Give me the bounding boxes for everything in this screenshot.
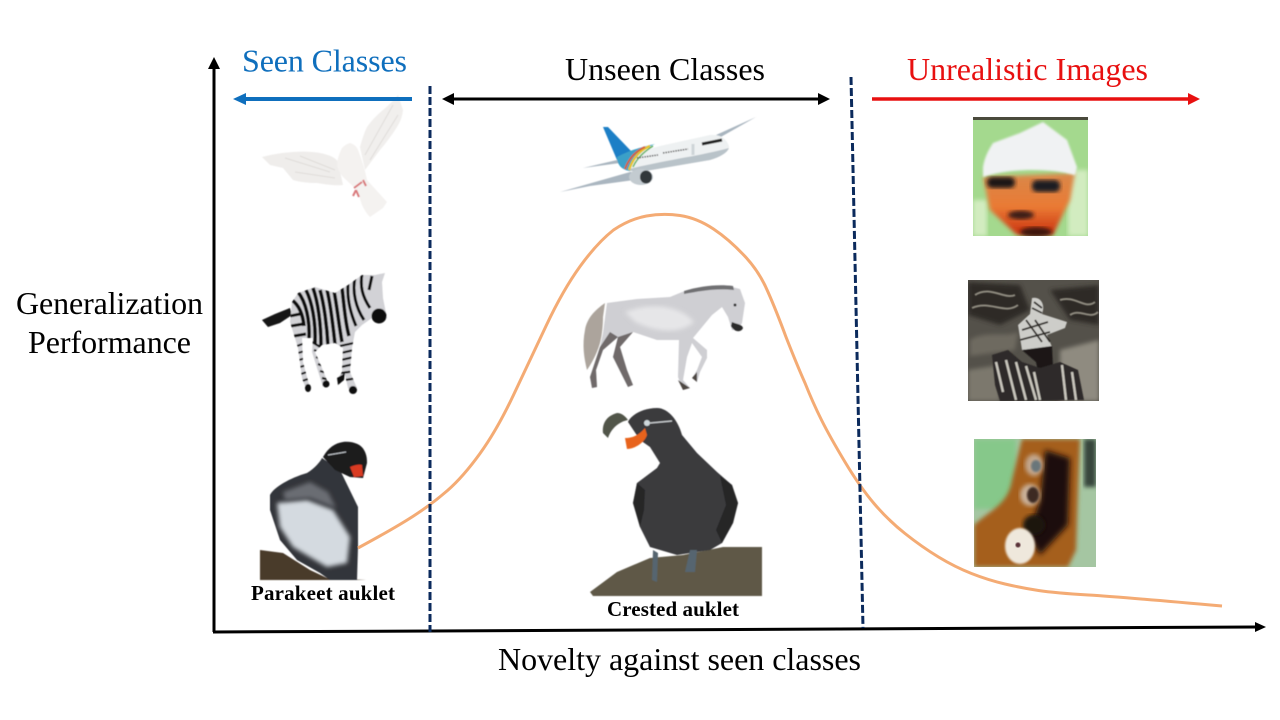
parakeet auklet icon bbox=[260, 442, 367, 580]
horizontal axis arrow bbox=[213, 622, 1266, 632]
distorted image: face bbox=[973, 117, 1088, 237]
label: crested auklet: Crested auklet bbox=[607, 597, 739, 621]
x axis title: Novelty against seen classes bbox=[498, 641, 861, 677]
horse icon: unseen class bbox=[584, 285, 745, 390]
arrow: unseen classes bbox=[442, 93, 830, 105]
performance curve bbox=[358, 214, 1222, 606]
crested auklet icon bbox=[590, 408, 762, 596]
divider: unseen / unrealistic bbox=[851, 77, 863, 628]
y axis title bbox=[16, 285, 203, 360]
heading: seen classes: Seen Classes bbox=[242, 42, 407, 78]
zebra icon: seen class bbox=[262, 273, 387, 394]
arrow: unrealistic images bbox=[872, 93, 1200, 105]
arrow: seen classes bbox=[233, 93, 412, 105]
label: parakeet auklet: Parakeet auklet bbox=[251, 581, 395, 605]
dove icon: seen class bbox=[262, 95, 403, 217]
divider: seen / unseen bbox=[428, 86, 432, 632]
distorted image: dogs bbox=[974, 439, 1096, 567]
y axis title: Performance bbox=[28, 324, 191, 360]
y axis title: Generalization bbox=[16, 285, 203, 321]
heading: unseen classes: Unseen Classes bbox=[565, 51, 765, 87]
heading: unrealistic images: Unrealistic Images bbox=[907, 51, 1148, 87]
airplane icon: unseen class bbox=[560, 117, 756, 192]
distorted image: zebra rider bbox=[968, 280, 1099, 401]
vertical axis arrow bbox=[208, 57, 220, 632]
